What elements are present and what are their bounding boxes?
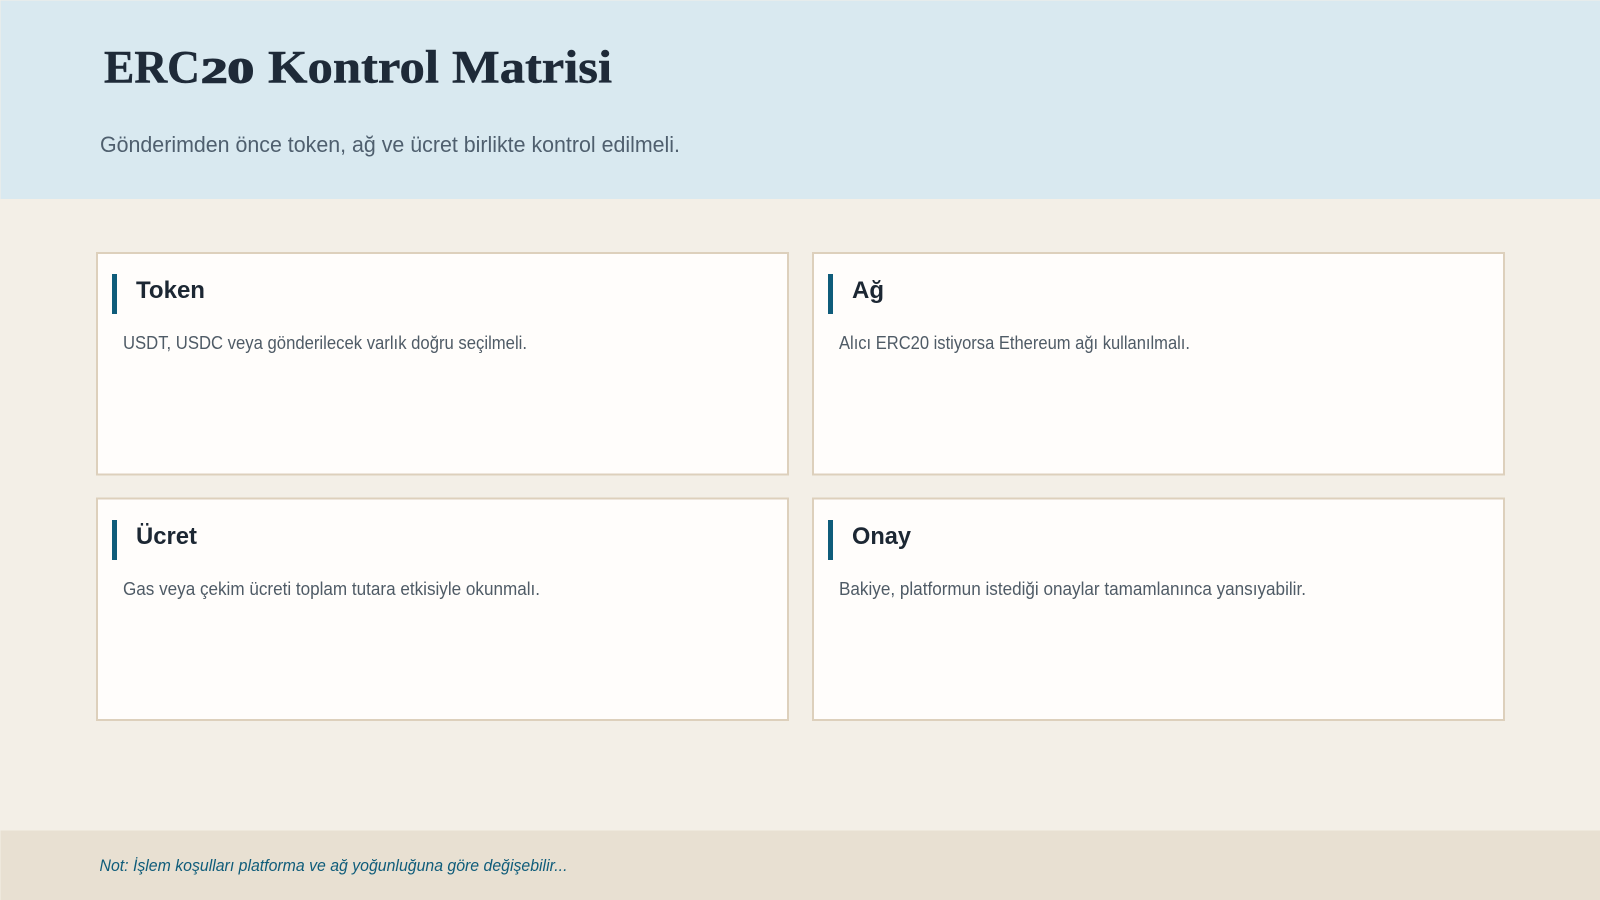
text: Ücret: Gas veya çekim ücreti toplam tutara etkisiyle okunmalı. [123, 579, 540, 599]
heading: Onay: Onay [852, 523, 912, 550]
title: Kontrol [268, 42, 439, 94]
subtitle: Gönderimden önce token, ağ ve ücret birlikte kontrol edilmeli. [100, 132, 680, 157]
heading: Ağ: Ağ [852, 277, 884, 304]
text: Token: USDT, USDC veya gönderilecek varlık doğru seçilmeli. [123, 333, 527, 353]
panel: Ücret [97, 498, 788, 720]
accent bar: Ücret [112, 520, 117, 560]
panel: Token [97, 253, 788, 474]
panel: Ağ [813, 253, 1504, 474]
header band [0, 0, 1600, 199]
text: Onay: Bakiye, platformun istediği onaylar tamamlanınca yansıyabilir. [839, 579, 1306, 599]
accent bar: Ağ [828, 274, 833, 314]
title: ERC [104, 42, 200, 94]
title: Matrisi [452, 42, 612, 94]
heading: Token: Token [136, 277, 205, 304]
accent bar: Token [112, 274, 117, 314]
heading: Ücret: Ücret [136, 523, 197, 550]
footer band [0, 830, 1600, 900]
accent bar: Onay [828, 520, 833, 560]
panel: Onay [813, 498, 1504, 720]
text: Ağ: Alıcı ERC20 istiyorsa Ethereum ağı kullanılmalı. [839, 333, 1190, 353]
title: 20 [201, 52, 254, 90]
footer note: Not: İşlem koşulları platforma ve ağ yoğunluğuna göre değişebilir... [100, 856, 568, 875]
